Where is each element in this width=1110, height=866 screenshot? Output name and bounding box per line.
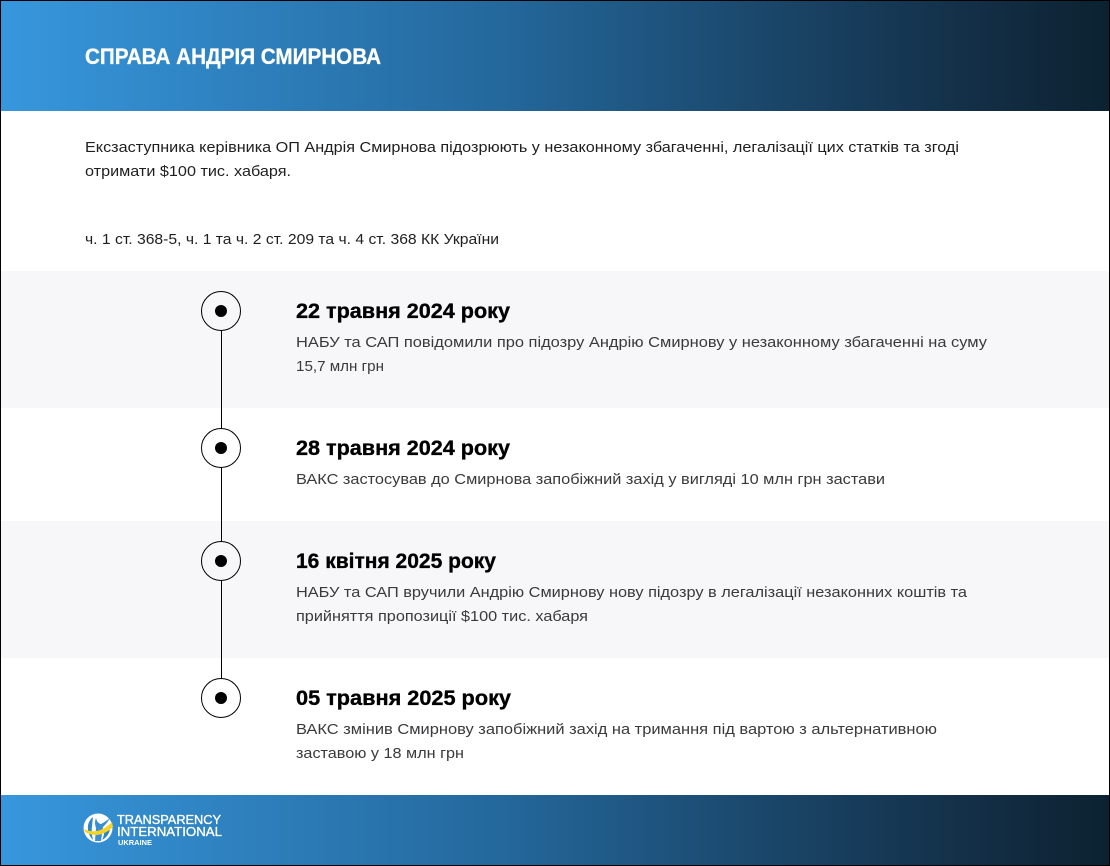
event 4: ВАКС змінив Смирнову запобіжний захід на тримання під вартою з альтернативною <box>296 721 937 738</box>
event 4: 05 травня 2025 року <box>296 687 511 710</box>
logo: Transparency International Ukraine: INTERNATIONAL <box>117 824 222 839</box>
row background 1 <box>1 271 1109 408</box>
header banner <box>1 1 1109 111</box>
icon: logo emblem <box>84 814 113 842</box>
event 2 <box>296 437 885 488</box>
event 1: 22 травня 2024 року <box>296 300 510 323</box>
intro text: Ексзаступника керівника ОП Андрія Смирнова підозрюють у незаконному збагаченні, легалізації цих статків та згоді <box>85 139 959 156</box>
event 3 <box>296 550 968 625</box>
event 4 <box>296 687 937 762</box>
intro text <box>85 139 959 180</box>
event 2: ВАКС застосував до Смирнова запобіжний захід у вигляді 10 млн грн застави <box>296 471 885 488</box>
event 1: 15,7 млн грн <box>296 358 384 375</box>
logo: Transparency International Ukraine: UKRAINE <box>118 840 152 847</box>
timeline marker 2 <box>202 428 240 468</box>
event 3: НАБУ та САП вручили Андрію Смирнову нову підозру в легалізації незаконних коштів та <box>296 584 968 601</box>
footer banner <box>1 795 1109 865</box>
timeline marker 1 <box>202 292 240 330</box>
title: СПРАВА АНДРІЯ СМИРНОВА <box>85 44 381 69</box>
row background 3 <box>1 521 1109 658</box>
timeline line <box>220 311 222 698</box>
legal articles: ч. 1 ст. 368-5, ч. 1 та ч. 2 ст. 209 та ч. 4 ст. 368 КК України <box>85 231 499 248</box>
event 2: 28 травня 2024 року <box>296 437 510 460</box>
logo: Transparency International Ukraine <box>84 812 222 847</box>
logo: Transparency International Ukraine: TRANSPARENCY <box>117 812 221 827</box>
event 3: 16 квітня 2025 року <box>296 550 496 573</box>
timeline marker 4 <box>202 678 240 718</box>
timeline marker 3 <box>202 542 240 580</box>
event 1: НАБУ та САП повідомили про підозру Андрію Смирнову у незаконному збагаченні на суму <box>296 334 988 351</box>
intro text: отримати $100 тис. хабаря. <box>85 163 291 180</box>
event 1 <box>296 300 988 375</box>
event 4: заставою у 18 млн грн <box>296 745 464 762</box>
event 3: прийняття пропозиції $100 тис. хабаря <box>296 608 588 625</box>
